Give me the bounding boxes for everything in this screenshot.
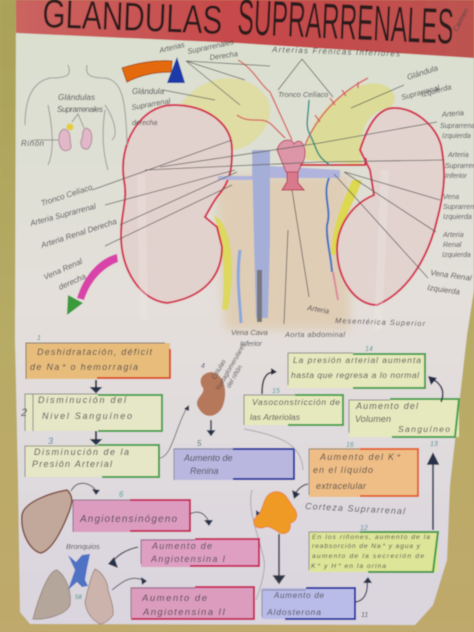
anatomy labels: Izquierda — [442, 252, 471, 259]
box 5: renina: Aumento de — [183, 453, 233, 463]
kidney cells note — [207, 337, 255, 396]
box 1: deshidratación — [26, 335, 170, 379]
paper fold — [141, 170, 385, 330]
label 13: 13 — [430, 441, 438, 448]
box: riñones reabsorción: K⁺ y H⁺ en la orina — [311, 563, 386, 570]
box: volumen sanguíneo: Aumento del — [355, 401, 419, 411]
signature: Carmen — [453, 8, 471, 33]
arrow from liver — [71, 483, 100, 495]
anatomy labels: Suprarrenales — [187, 37, 235, 56]
box: vasoconstricción — [244, 388, 343, 425]
box: aldosterona: Aumento de — [273, 591, 325, 600]
box 3: presión arterial: Disminución de la — [34, 447, 129, 457]
box: potasio: extracelular — [316, 481, 367, 491]
box: aldosterona: Aldosterona — [266, 607, 321, 617]
box: vasoconstricción: las Arteriolas — [250, 412, 301, 422]
box: presión corriente: hasta que regresa a lo normal — [291, 370, 420, 380]
box: presión corriente — [288, 346, 425, 388]
anatomy labels: Mesentérica Superior — [335, 316, 426, 328]
adrenal gland orange — [254, 484, 308, 534]
pale loop line — [244, 429, 303, 600]
bronchi and lungs: Bronquios — [66, 542, 100, 551]
box: potasio: 16 — [346, 442, 354, 449]
kidney icon — [197, 363, 225, 416]
anatomy labels: Arteria Suprarrenal — [28, 202, 97, 228]
arrow from lungs — [112, 577, 147, 590]
box: riñones reabsorción: 12 — [360, 525, 368, 532]
box: angiotensina II — [131, 587, 254, 619]
bronchi and lungs — [33, 542, 113, 624]
box: angiotensina II: Angiotensina II — [142, 607, 225, 618]
anatomy labels: Aorta abdominal — [284, 330, 345, 339]
flow panel — [20, 335, 459, 624]
icon: blue triangle — [167, 57, 185, 83]
box 1: deshidratación: 1 — [37, 335, 41, 342]
left ureter — [238, 250, 241, 323]
kidney icon: 4 — [201, 363, 205, 370]
small body diagram — [21, 65, 127, 170]
box: aldosterona — [262, 588, 368, 619]
lower left yellow strip — [214, 215, 232, 310]
cava shadow — [257, 270, 262, 322]
title banner — [16, 0, 474, 58]
box: angiotensina II: Aumento de — [141, 593, 207, 604]
arrow 1 to 2 — [92, 380, 100, 392]
connector — [34, 114, 84, 140]
left kidney — [121, 105, 232, 303]
box 1: deshidratación: Deshidratación, déficit — [37, 347, 152, 357]
anatomy labels: Vena Cava — [231, 328, 268, 337]
labels: Glándulas — [58, 93, 95, 102]
box: angiotensinógeno: 6 — [119, 490, 124, 499]
title — [42, 0, 455, 55]
box 2: nivel sanguíneo — [20, 394, 162, 431]
anatomy labels: Inferior — [240, 341, 262, 348]
kidney cells note: del riñón — [225, 364, 244, 389]
arrow to renina — [208, 420, 214, 435]
anatomy labels: Izquierda — [427, 283, 461, 297]
liver — [22, 483, 100, 553]
left lung — [33, 570, 70, 619]
box 2: nivel sanguíneo: 2 — [20, 407, 27, 419]
arrow to top box — [262, 368, 277, 394]
anatomy labels: Arteria — [442, 232, 464, 239]
box 3: presión arterial: Presión Arterial — [32, 459, 113, 469]
right kidney — [337, 108, 444, 305]
small body diagram: Riñón — [21, 139, 45, 148]
small left kidney — [59, 129, 71, 151]
small body diagram: Suprarrenales — [57, 105, 103, 114]
anatomy labels: Derecha — [209, 49, 238, 62]
adrenal gland: left — [180, 78, 270, 150]
anatomy labels: Inferior — [445, 173, 467, 180]
box: volumen sanguíneo — [349, 399, 459, 437]
anatomy labels: Renal — [443, 242, 462, 249]
box 2: nivel sanguíneo: Nivel Sanguíneo — [42, 411, 132, 421]
left renal artery — [300, 158, 366, 165]
box: presión corriente: La presión arterial aumenta — [293, 355, 421, 365]
box: riñones reabsorción: En los riñones, aumento de la — [312, 534, 430, 541]
arrow aldosterona to riñones box — [356, 577, 372, 602]
kidney cells note: Yuxtaglomerulares — [215, 341, 248, 392]
celiac trunk heart — [277, 140, 305, 172]
pink vessel right — [333, 272, 338, 300]
superior vessels — [237, 60, 368, 145]
box: potasio: Aumento del K⁺ — [319, 452, 401, 462]
gland label: Corteza Suprarrenal — [305, 501, 406, 516]
anatomy panel — [21, 37, 474, 348]
right lung — [85, 569, 113, 624]
box 5: renina — [174, 439, 295, 480]
renal veins — [218, 165, 340, 180]
arrow gland to aldosterona — [274, 534, 284, 583]
box: potasio — [309, 442, 418, 497]
pointer lines — [92, 59, 443, 324]
anatomy labels: Arteria — [447, 152, 469, 159]
box 5: renina: Renina — [190, 466, 219, 476]
blue branch — [307, 100, 330, 165]
bronchi and lungs: 58 — [75, 595, 82, 601]
vena cava — [252, 150, 270, 318]
anatomy labels: Vena Renal — [430, 268, 472, 283]
box 3: presión arterial: 3 — [48, 436, 53, 446]
warm centre shading — [215, 175, 350, 330]
box: riñones reabsorción: aumento de la secreción de — [312, 553, 424, 560]
box: potasio: en el líquido — [313, 465, 373, 475]
anatomy labels — [28, 37, 474, 348]
box: angiotensinógeno — [73, 490, 190, 532]
anatomy labels: Glándula — [406, 63, 440, 82]
anatomy labels: Izquierda — [420, 82, 452, 99]
anatomy labels: Arterias Frénicas Inferiores — [271, 45, 400, 58]
box: riñones reabsorción — [309, 525, 438, 572]
anatomy labels: Arteria — [440, 108, 464, 119]
anatomy labels: Vena — [443, 194, 459, 201]
curved arrow to kidney — [159, 405, 189, 458]
anatomy labels: Izquierda — [443, 214, 472, 221]
anatomy labels: Suprarrenal — [400, 83, 441, 102]
icon: orange arrow — [122, 61, 172, 82]
arrow to lungs — [108, 547, 138, 568]
box: aldosterona: 11 — [361, 612, 368, 619]
anatomy labels: derecha — [132, 120, 157, 127]
anatomy labels: Tronco Celíaco — [278, 90, 328, 99]
arrow up to volume — [428, 454, 438, 530]
arrow to presión — [428, 376, 443, 402]
arrow to angiotensina I — [190, 512, 213, 526]
anatomy labels: Arteria Renal Derecha — [39, 217, 118, 250]
icon: green arrowhead — [67, 295, 83, 315]
box 2: nivel sanguíneo: Disminución del — [38, 395, 127, 405]
small yellow adrenal — [66, 124, 74, 130]
box: angiotensina I: Aumento de — [151, 541, 212, 551]
anatomy labels: derecha — [57, 272, 88, 292]
box: angiotensinógeno: Angiotensinógeno — [79, 514, 177, 525]
blue ureter right — [326, 178, 332, 272]
box: angiotensina I — [141, 539, 259, 567]
arrow 2 to 3 — [92, 431, 100, 444]
icon: magenta arrow — [77, 254, 118, 300]
box: volumen sanguíneo: Sanguíneo — [398, 424, 450, 434]
box: riñones reabsorción: reabsorción de Na⁺ y agua y — [312, 543, 421, 550]
marker — [256, 510, 260, 516]
lower right yellow strip — [331, 180, 362, 255]
box 1: deshidratación: de Na⁺ o hemorragia — [30, 362, 138, 372]
anatomy labels: Arteria — [306, 303, 330, 316]
box: volumen sanguíneo: Volumen — [355, 414, 391, 424]
anatomy labels: Izquierda — [442, 133, 471, 140]
arrow k to gland — [292, 484, 308, 499]
box: vasoconstricción: 15 — [272, 388, 280, 395]
anatomy labels: Tronco Celíaco — [40, 183, 94, 208]
anatomy labels: Arterias — [157, 40, 186, 55]
kidney cells note: Células — [211, 358, 228, 381]
adrenal gland: right — [306, 83, 395, 165]
body outline — [25, 65, 127, 170]
box 3: presión arterial — [25, 436, 159, 477]
box 5: renina: 5 — [197, 439, 202, 448]
anatomy labels: Glándula — [132, 87, 165, 96]
box: vasoconstricción: Vasoconstricción de — [252, 397, 340, 407]
small right kidney — [81, 128, 92, 149]
box: presión corriente: 14 — [365, 346, 373, 353]
anatomy labels: Suprarrenal — [131, 96, 171, 112]
bronchi — [68, 554, 90, 590]
anatomy labels: Vena Renal — [42, 257, 84, 282]
box: angiotensina I: Angiotensina I — [150, 554, 225, 564]
aorta — [282, 160, 304, 190]
